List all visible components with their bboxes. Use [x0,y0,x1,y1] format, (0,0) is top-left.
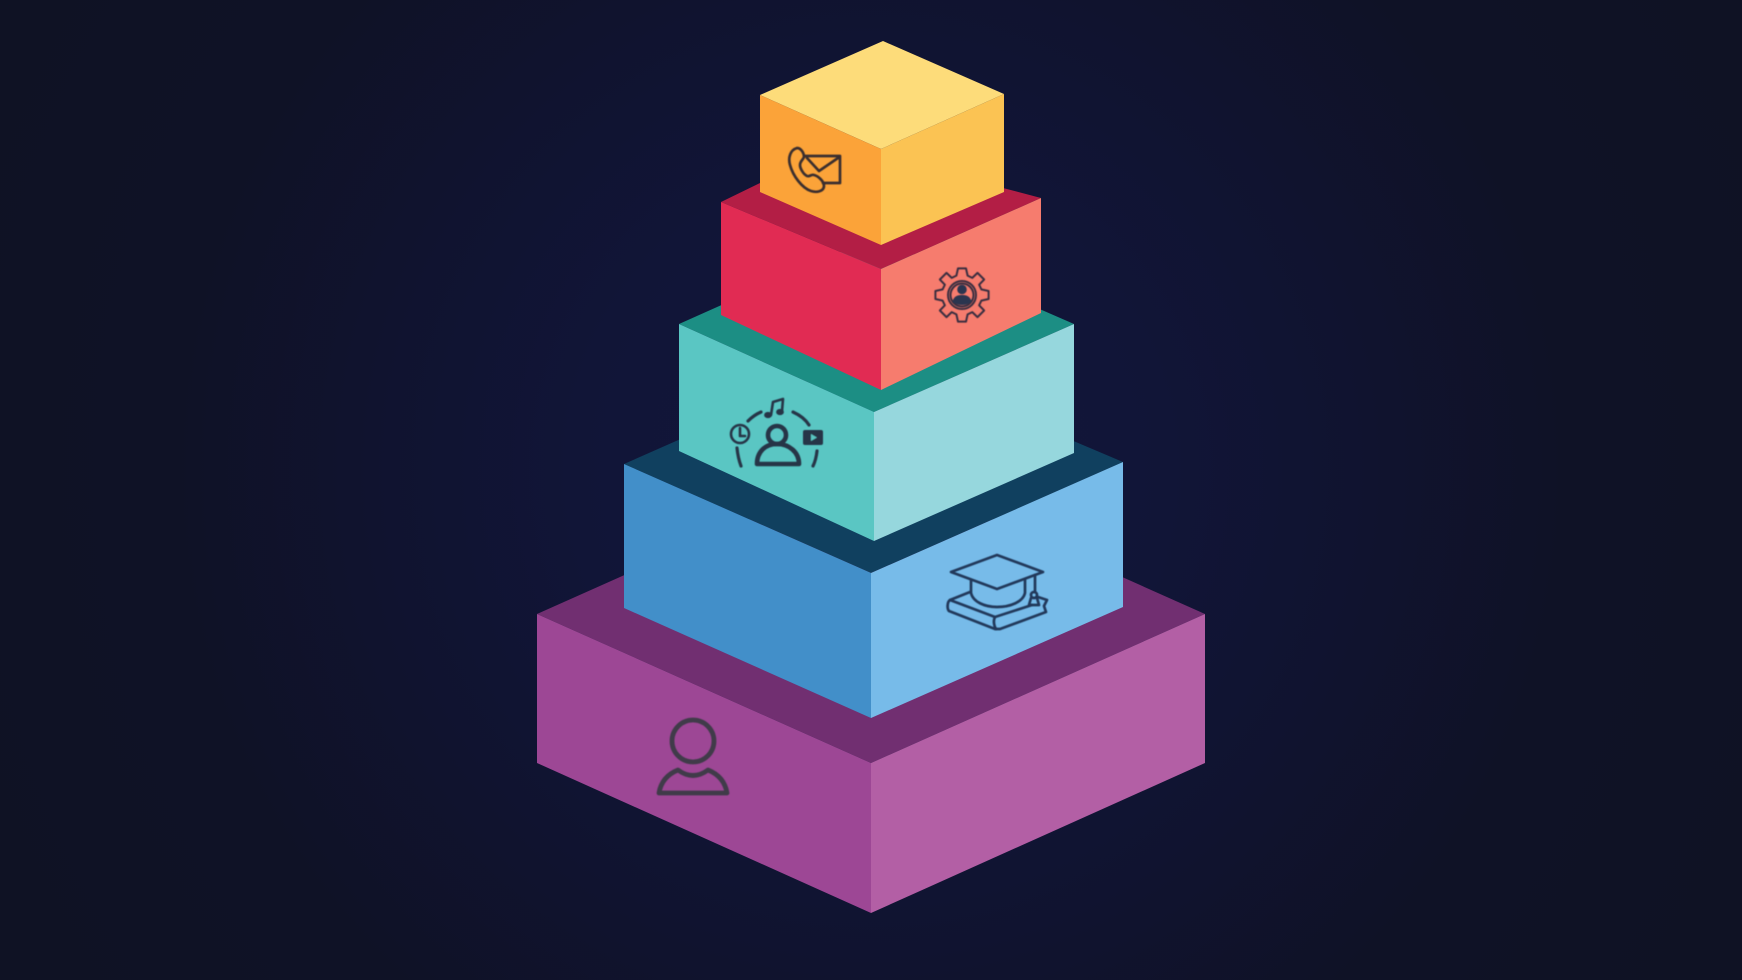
icon: user [659,720,727,793]
icon: graduation cap on book [948,555,1047,629]
video [803,430,823,445]
level 4: red block [721,183,1041,390]
music note [765,399,783,417]
person [757,426,799,464]
icon: gear with user [935,268,989,322]
level 3: teal block [679,237,1074,541]
clock [731,425,749,443]
icon: phone and envelope [789,148,840,192]
level 2: blue block [624,355,1123,718]
level 1: purple block [537,465,1205,913]
ring arcs [737,412,817,466]
level 5: yellow block [760,41,1004,245]
icon: person with media ring [731,399,823,466]
